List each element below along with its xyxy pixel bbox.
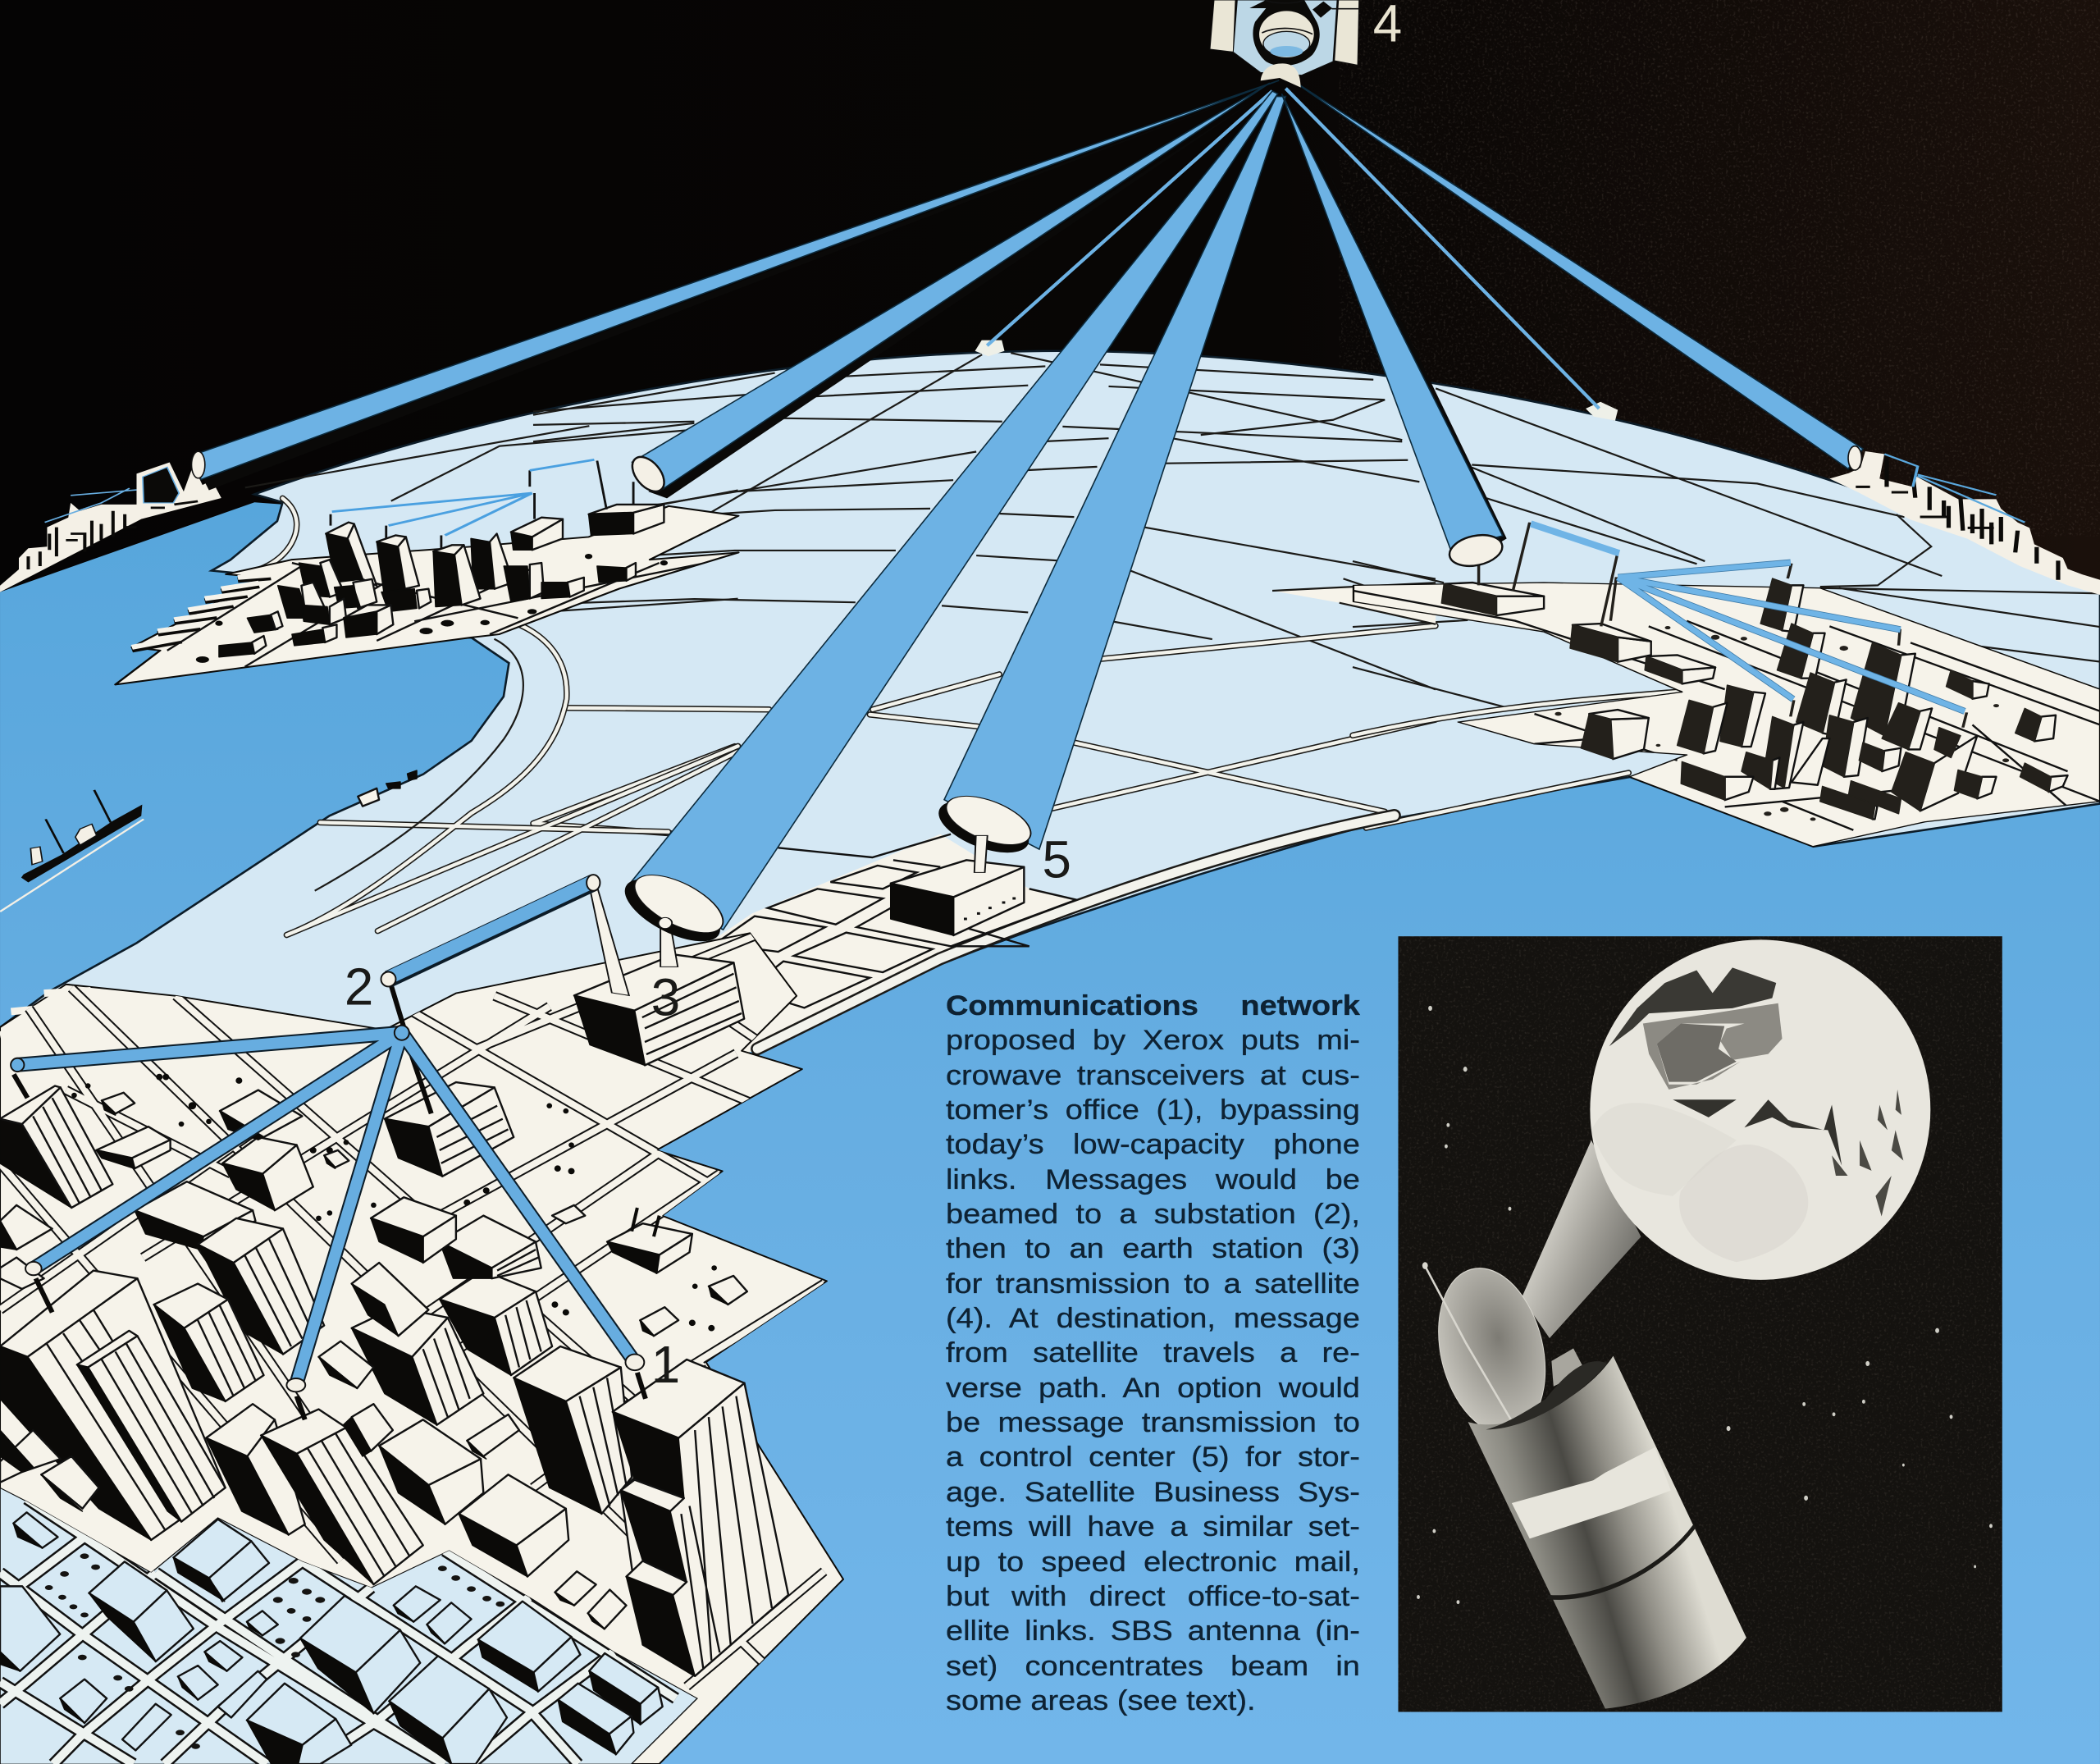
caption text block: for transmission to a satellite — [946, 1268, 1360, 1300]
edge blocks — [0, 1430, 99, 1511]
caption text block: tems will have a similar set- — [946, 1511, 1360, 1542]
caption text block: proposed by Xerox puts mi- — [946, 1025, 1360, 1056]
caption text block: today’s low-capacity phone — [946, 1129, 1360, 1160]
satellite — [1210, 0, 1360, 88]
inset photo: SBS antenna beam on globe — [1398, 936, 2002, 1711]
caption text block: links. Messages would be — [946, 1164, 1360, 1195]
caption text block: be message transmission to — [946, 1407, 1360, 1438]
caption text block: then to an earth station (3) — [946, 1233, 1360, 1264]
suburb tiny houses — [45, 1553, 504, 1749]
cylindrical satellite body — [1468, 1356, 1746, 1709]
star specks — [1417, 1006, 1993, 1604]
pale suburb quarter — [0, 1488, 697, 1764]
earth station 3 and control center 5 buildings — [574, 860, 1024, 1065]
suburb streets — [0, 1499, 676, 1764]
beam cone — [1522, 1140, 1641, 1338]
right city extension into the continent — [1272, 578, 1436, 624]
land: main pale continent — [0, 351, 2100, 1085]
beam: to far right station — [1289, 78, 1863, 472]
station 3 mast and feed — [589, 884, 678, 995]
dish: earth station 3 — [606, 867, 740, 949]
dish: control center 5 — [921, 788, 1047, 872]
caption text block: (4). At destination, message — [946, 1303, 1360, 1334]
caption text block: crowave transceivers at cus- — [946, 1060, 1360, 1091]
right city towers and blocks — [1441, 578, 2068, 819]
beam: to control center 5 — [921, 97, 1285, 872]
caption text block: tomer’s office (1), bypassing — [946, 1095, 1360, 1126]
tall striped block, upper middle — [135, 1181, 324, 1355]
sky grain, upper right — [1340, 0, 2100, 536]
right city microwave links — [1531, 523, 1965, 711]
label 1: 1 — [651, 1336, 680, 1394]
globe — [1590, 939, 1930, 1280]
control center 5 building — [891, 860, 1024, 935]
ship at sea — [0, 790, 144, 912]
peninsula towers and blocks — [219, 505, 664, 657]
right city antennas — [1479, 523, 1967, 728]
antenna masts — [14, 985, 646, 1419]
caption text block: age. Satellite Business Sys- — [946, 1477, 1360, 1508]
caption text block: ellite links. SBS antenna (in- — [946, 1615, 1360, 1647]
center-front tower with antenna — [206, 1404, 423, 1584]
earth station 3 building — [574, 954, 744, 1065]
antenna dish and feed — [1418, 1245, 1586, 1456]
downtown buildings — [0, 985, 788, 1676]
beam: thin far links — [987, 89, 1599, 409]
link: substation 2 to earth station 3 — [381, 875, 600, 986]
peninsula city on the left — [116, 459, 738, 684]
road network, left and right of continent — [241, 388, 2100, 935]
right city on the coast — [1354, 523, 2100, 847]
peninsula antennas — [331, 461, 633, 548]
small buildings on the far shore — [358, 770, 417, 807]
shore strip with parcels below stations 3 and 5 — [574, 816, 1395, 1083]
top horizon station — [975, 340, 1004, 356]
striped office block with antenna — [385, 1082, 514, 1177]
beam: to far left station — [191, 80, 1279, 491]
middle blocks — [318, 1197, 632, 1629]
sea — [0, 502, 2100, 1764]
beam: to right city earth station — [1281, 94, 1507, 570]
links: hub to customer offices — [11, 1026, 644, 1392]
caption text block: a control center (5) for stor- — [946, 1442, 1360, 1473]
beam: to left city earth station — [626, 83, 1272, 498]
label 5: 5 — [1042, 830, 1071, 889]
label 2: 2 — [345, 957, 373, 1016]
caption text block: Communications network — [946, 990, 1360, 1021]
caption text block: up to speed electronic mail, — [946, 1546, 1360, 1577]
peninsula microwave links — [332, 459, 594, 535]
low blocks — [0, 1090, 349, 1289]
far small blocks and rooftop antennas — [552, 1205, 747, 1336]
tower with antenna, far left — [0, 1085, 112, 1208]
large tower, far left — [0, 1271, 226, 1540]
caption text block: set) concentrates beam in — [946, 1651, 1360, 1682]
caption text block: verse path. An option would — [946, 1373, 1360, 1404]
top horizon station, right — [1586, 402, 1618, 421]
far right skyline on the horizon — [1829, 451, 2100, 595]
building 1: tall stepped tower — [613, 1360, 788, 1676]
label 3: 3 — [651, 969, 680, 1027]
caption text block — [945, 990, 1360, 1716]
caption text block: beamed to a substation (2), — [946, 1199, 1360, 1230]
road network, centre of continent — [533, 353, 1436, 834]
caption text block: some areas (see text). — [946, 1685, 1256, 1716]
caption text block: but with direct office-to-sat- — [946, 1581, 1360, 1612]
far left skyline on the horizon — [0, 462, 221, 592]
beam: to earth station 3 — [606, 91, 1278, 949]
striped block, middle — [154, 1284, 263, 1401]
bottom-left foreground downtown: ground plate and streets — [0, 912, 862, 1764]
caption text block: from satellite travels a re- — [946, 1337, 1360, 1369]
suburb houses — [0, 1512, 663, 1764]
